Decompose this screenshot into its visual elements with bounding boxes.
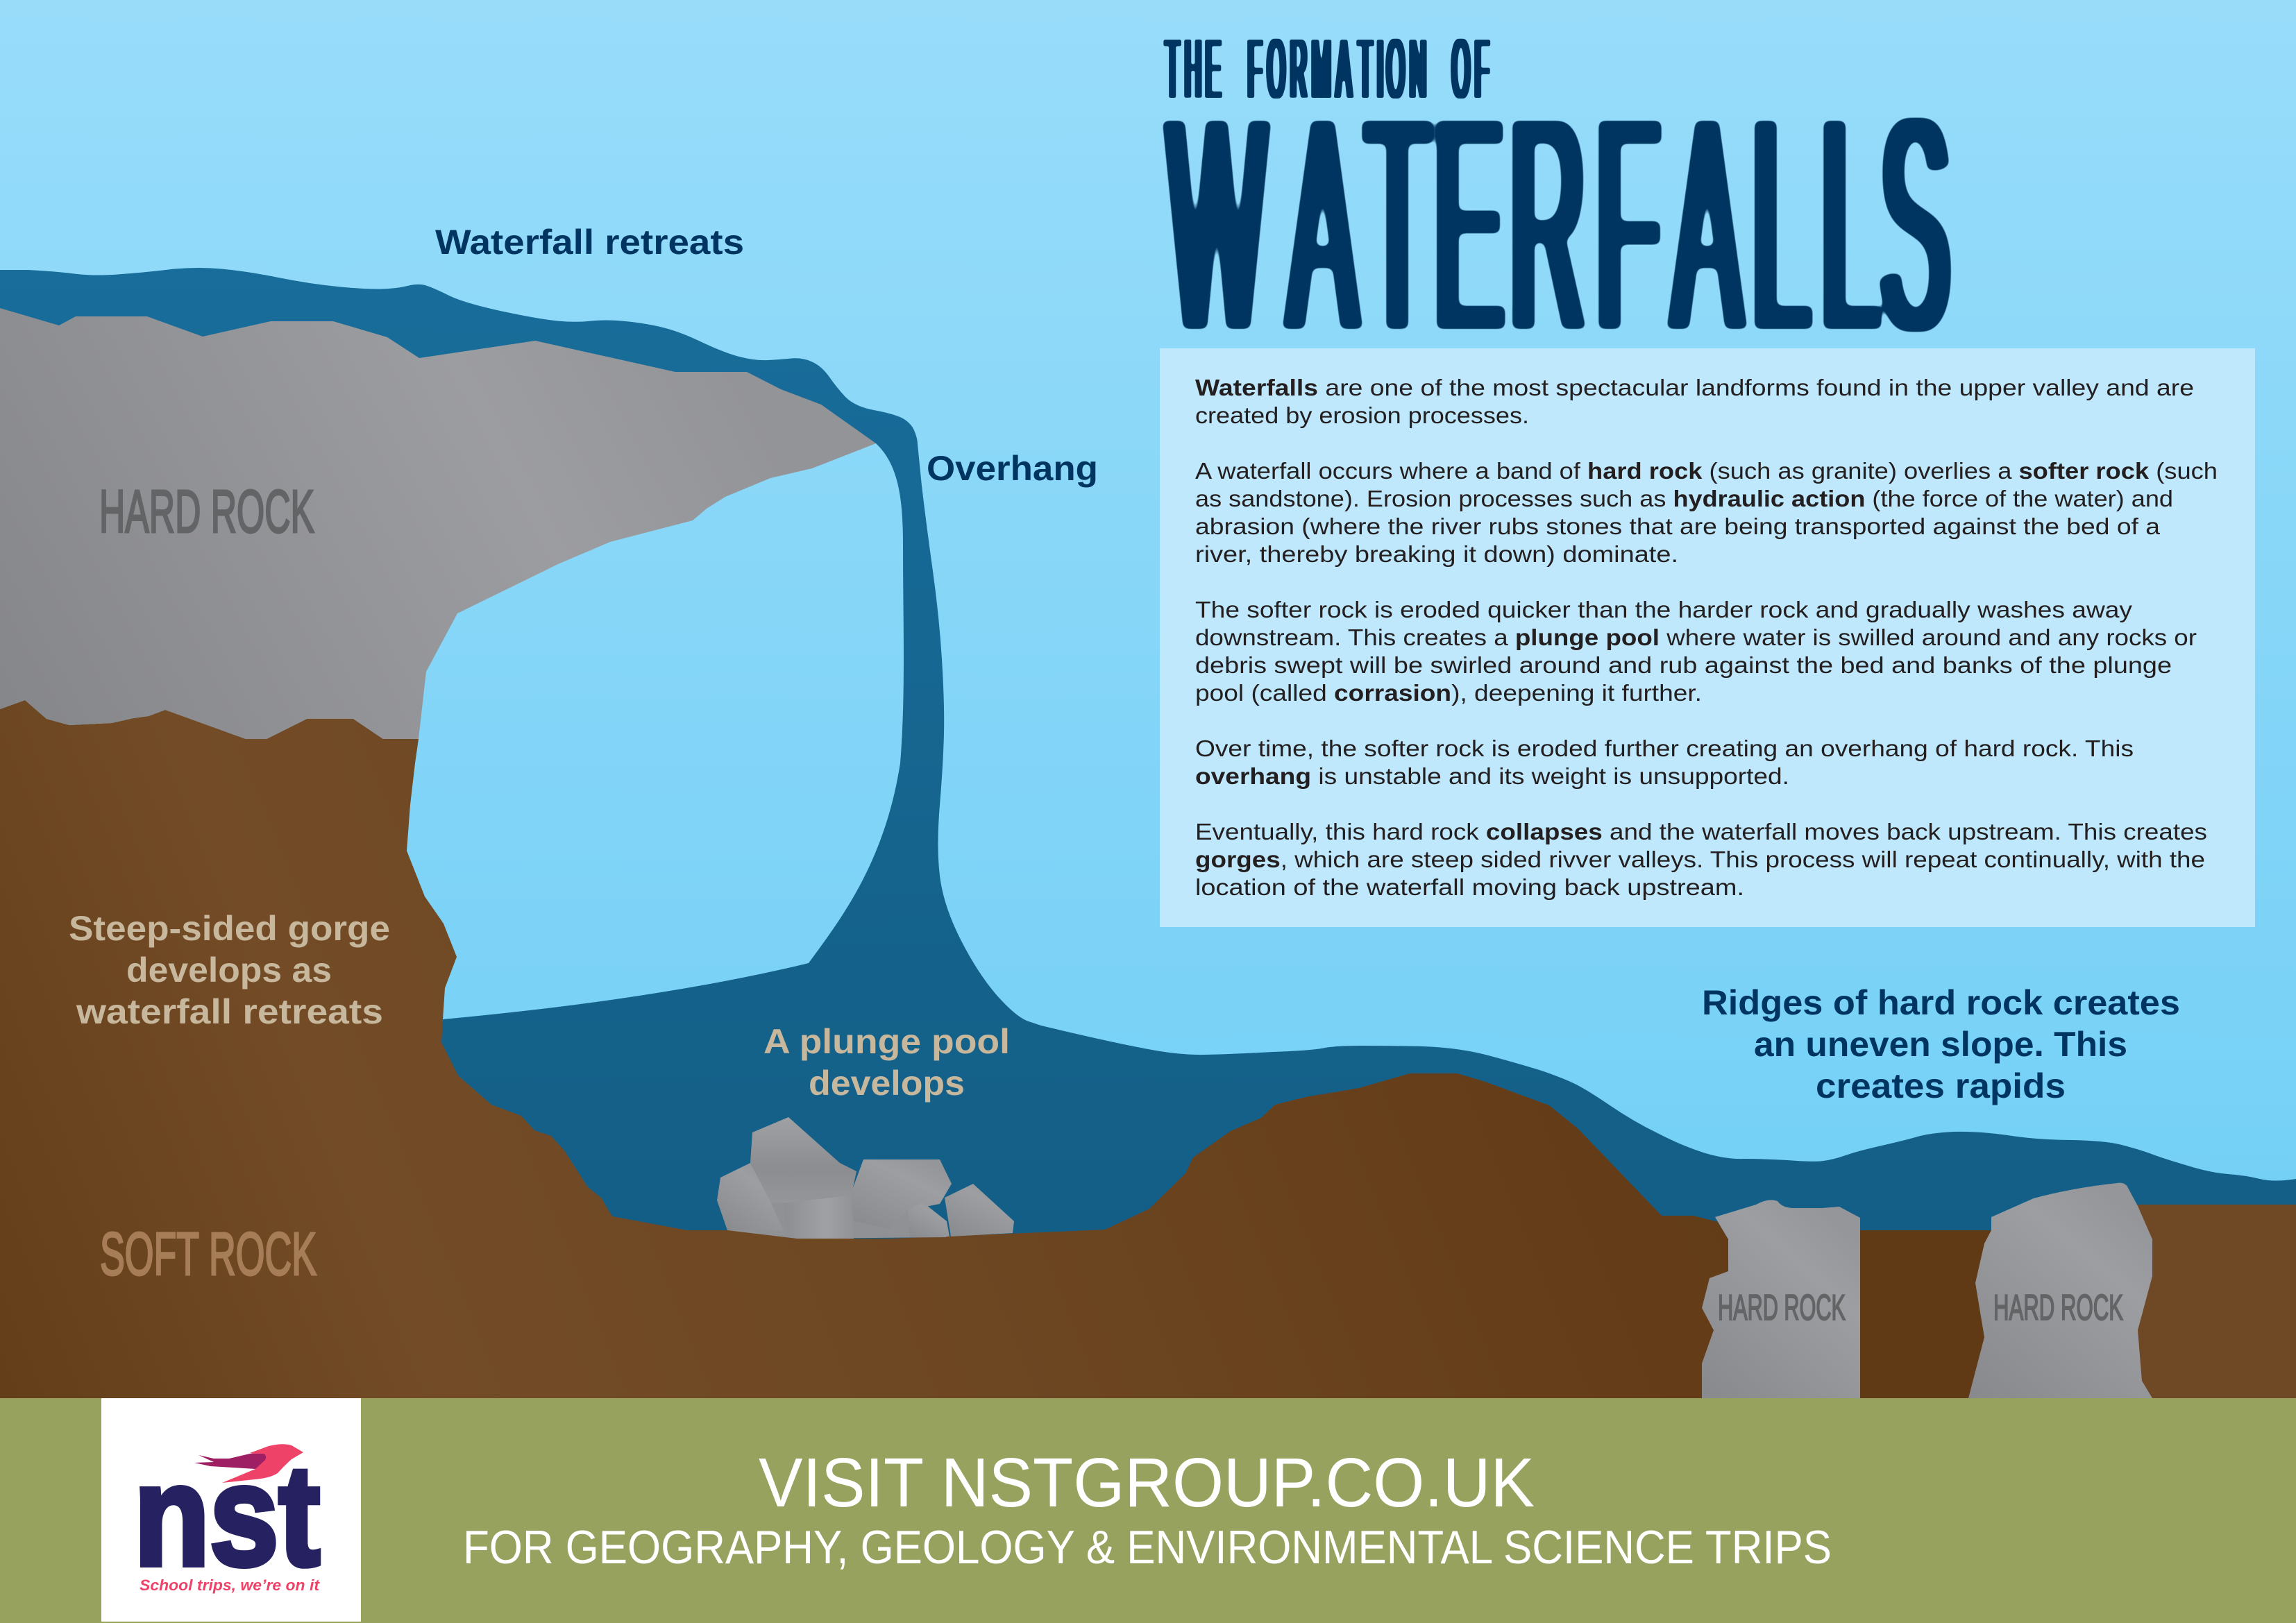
footer headline: VISIT NSTGROUP.CO.UK xyxy=(759,1444,1535,1522)
paragraph 2: as sandstone). Erosion processes such as hydraulic action (the force of the water) and xyxy=(1195,486,2173,511)
paragraph 1 xyxy=(1195,375,2194,428)
paragraph 1: created by erosion processes. xyxy=(1195,402,1529,428)
label: steep-sided gorge xyxy=(69,909,390,1031)
paragraph 2: abrasion (where the river rubs stones that are being transported against the bed of a xyxy=(1195,513,2161,539)
paragraph 4: overhang is unstable and its weight is unsupported. xyxy=(1195,763,1789,789)
paragraph 2: river, thereby breaking it down) dominate. xyxy=(1195,541,1678,567)
paragraph 4 xyxy=(1195,736,2134,789)
label: hard rock on ridge 1: HARD ROCK xyxy=(1718,1288,1846,1328)
soft rock between ridges xyxy=(1805,1230,2013,1398)
paragraph 3: pool (called corrasion ), deepening it further. xyxy=(1195,680,1702,706)
label: steep-sided gorge: waterfall retreats xyxy=(76,992,383,1031)
title line: the formation of: THE FORMATION OF xyxy=(1165,21,1489,116)
title line: waterfalls: WATERFALLS xyxy=(1168,56,1950,394)
hard rock cap layer xyxy=(0,308,876,739)
paragraph 3: debris swept will be swirled around and rub against the bed and banks of the plunge xyxy=(1195,652,2172,678)
river and waterfall water xyxy=(0,268,2296,1249)
paragraph 5: gorges , which are steep sided rivver valleys. This process will repeat continually, with the xyxy=(1195,847,2205,872)
label: ridges create rapids: creates rapids xyxy=(1816,1067,2066,1105)
label: steep-sided gorge: develops as xyxy=(126,951,332,989)
label: hard rock: HARD ROCK xyxy=(99,478,314,545)
paragraph 2 xyxy=(1195,458,2218,567)
hard rock ridge 2 xyxy=(1968,1183,2152,1398)
label: hard rock on ridge 2: HARD ROCK xyxy=(1993,1288,2123,1328)
label: ridges create rapids: an uneven slope. This xyxy=(1754,1025,2127,1064)
paragraph 3 xyxy=(1195,597,2197,706)
paragraph 3: downstream. This creates a plunge pool where water is swilled around and any rocks or xyxy=(1195,624,2197,650)
paragraph 4: Over time, the softer rock is eroded further creating an overhang of hard rock. This xyxy=(1195,736,2134,761)
icon: bird xyxy=(194,1444,303,1483)
label: overhang: Overhang xyxy=(927,449,1098,488)
paragraph 2: A waterfall occurs where a band of hard rock (such as granite) overlies a softer rock (such xyxy=(1195,458,2218,484)
label: ridges create rapids: Ridges of hard rock creates xyxy=(1702,983,2180,1022)
label: ridges create rapids xyxy=(1702,983,2180,1105)
title xyxy=(1165,21,1950,394)
paragraph 5: location of the waterfall moving back upstream. xyxy=(1195,874,1744,900)
label: plunge pool xyxy=(763,1022,1010,1103)
panel: explanation text xyxy=(1160,348,2255,927)
label: waterfall retreats: Waterfall retreats xyxy=(435,223,744,262)
hard rock ridge 1 xyxy=(1702,1200,1860,1398)
label: plunge pool: A plunge pool xyxy=(763,1022,1010,1061)
paragraph 5: Eventually, this hard rock collapses and the waterfall moves back upstream. This creates xyxy=(1195,819,2207,844)
soft rock layer with gorge, plunge pool floor and ridge xyxy=(0,700,1735,1398)
paragraph 3: The softer rock is eroded quicker than the harder rock and gradually washes away xyxy=(1195,597,2133,622)
paragraph 1: Waterfalls are one of the most spectacular landforms found in the upper valley and are xyxy=(1195,375,2194,400)
logo: nst xyxy=(101,1398,361,1622)
tagline: School trips, we’re on it xyxy=(140,1577,321,1594)
label: plunge pool: develops xyxy=(809,1064,965,1103)
collapsed rocks in plunge pool xyxy=(717,1117,1014,1239)
footer subheading: FOR GEOGRAPHY, GEOLOGY & ENVIRONMENTAL SCIENCE TRIPS xyxy=(463,1521,1832,1574)
footer band xyxy=(0,1398,2296,1623)
wordmark: nst xyxy=(134,1436,320,1595)
label: steep-sided gorge: Steep-sided gorge xyxy=(69,909,390,948)
soft rock right of ridges xyxy=(2117,1205,2296,1398)
label: soft rock: SOFT ROCK xyxy=(100,1221,316,1288)
paragraph 5 xyxy=(1195,819,2207,900)
